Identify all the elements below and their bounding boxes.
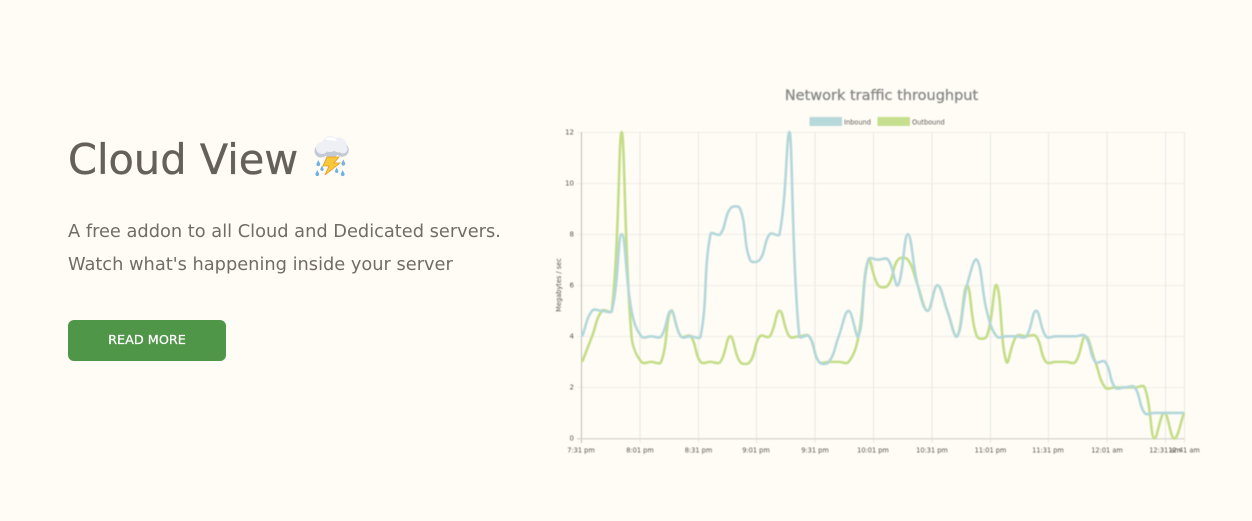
x axis labels	[567, 446, 1200, 454]
line: outbound	[582, 132, 1184, 438]
y axis labels: 6	[570, 282, 575, 290]
x axis labels: 8:01 pm	[626, 446, 654, 454]
x axis labels: 12:31 am	[1149, 446, 1181, 454]
x axis labels: 11:01 pm	[975, 446, 1006, 454]
x axis labels: 9:01 pm	[742, 446, 770, 454]
y axis title: Megabytes / sec	[555, 258, 563, 312]
x axis labels: 10:31 pm	[916, 446, 948, 454]
x axis labels: 7:31 pm	[567, 446, 595, 454]
legend: Outbound	[912, 118, 945, 126]
y axis labels: 12	[565, 128, 574, 136]
chart title: Network traffic throughput	[785, 88, 978, 104]
series lines	[582, 132, 1184, 438]
button: read more: READ MORE	[108, 333, 186, 348]
y axis labels: 10	[565, 180, 574, 188]
y axis labels: 4	[570, 332, 575, 340]
description text	[68, 221, 501, 275]
title: Cloud View	[68, 135, 298, 184]
x axis labels: 9:31 pm	[801, 446, 829, 454]
legend	[810, 117, 945, 126]
button: read more	[68, 320, 226, 361]
line: inbound	[582, 132, 1184, 414]
description text: A free addon to all Cloud and Dedicated servers.	[68, 221, 501, 242]
x axis labels: 10:01 pm	[857, 446, 889, 454]
y axis labels	[565, 128, 575, 442]
y axis labels: 0	[570, 434, 574, 442]
description text: Watch what's happening inside your server	[68, 254, 453, 275]
y axis labels: 2	[570, 384, 574, 392]
y axis labels: 8	[570, 230, 574, 238]
icon: storm cloud with lightning and rain	[314, 136, 349, 176]
x axis labels: 12:41 am	[1168, 446, 1200, 454]
x axis labels: 8:31 pm	[685, 446, 712, 454]
legend: Inbound	[844, 118, 871, 126]
x axis labels: 11:31 pm	[1032, 446, 1064, 454]
x axis labels: 12:01 am	[1091, 446, 1123, 454]
